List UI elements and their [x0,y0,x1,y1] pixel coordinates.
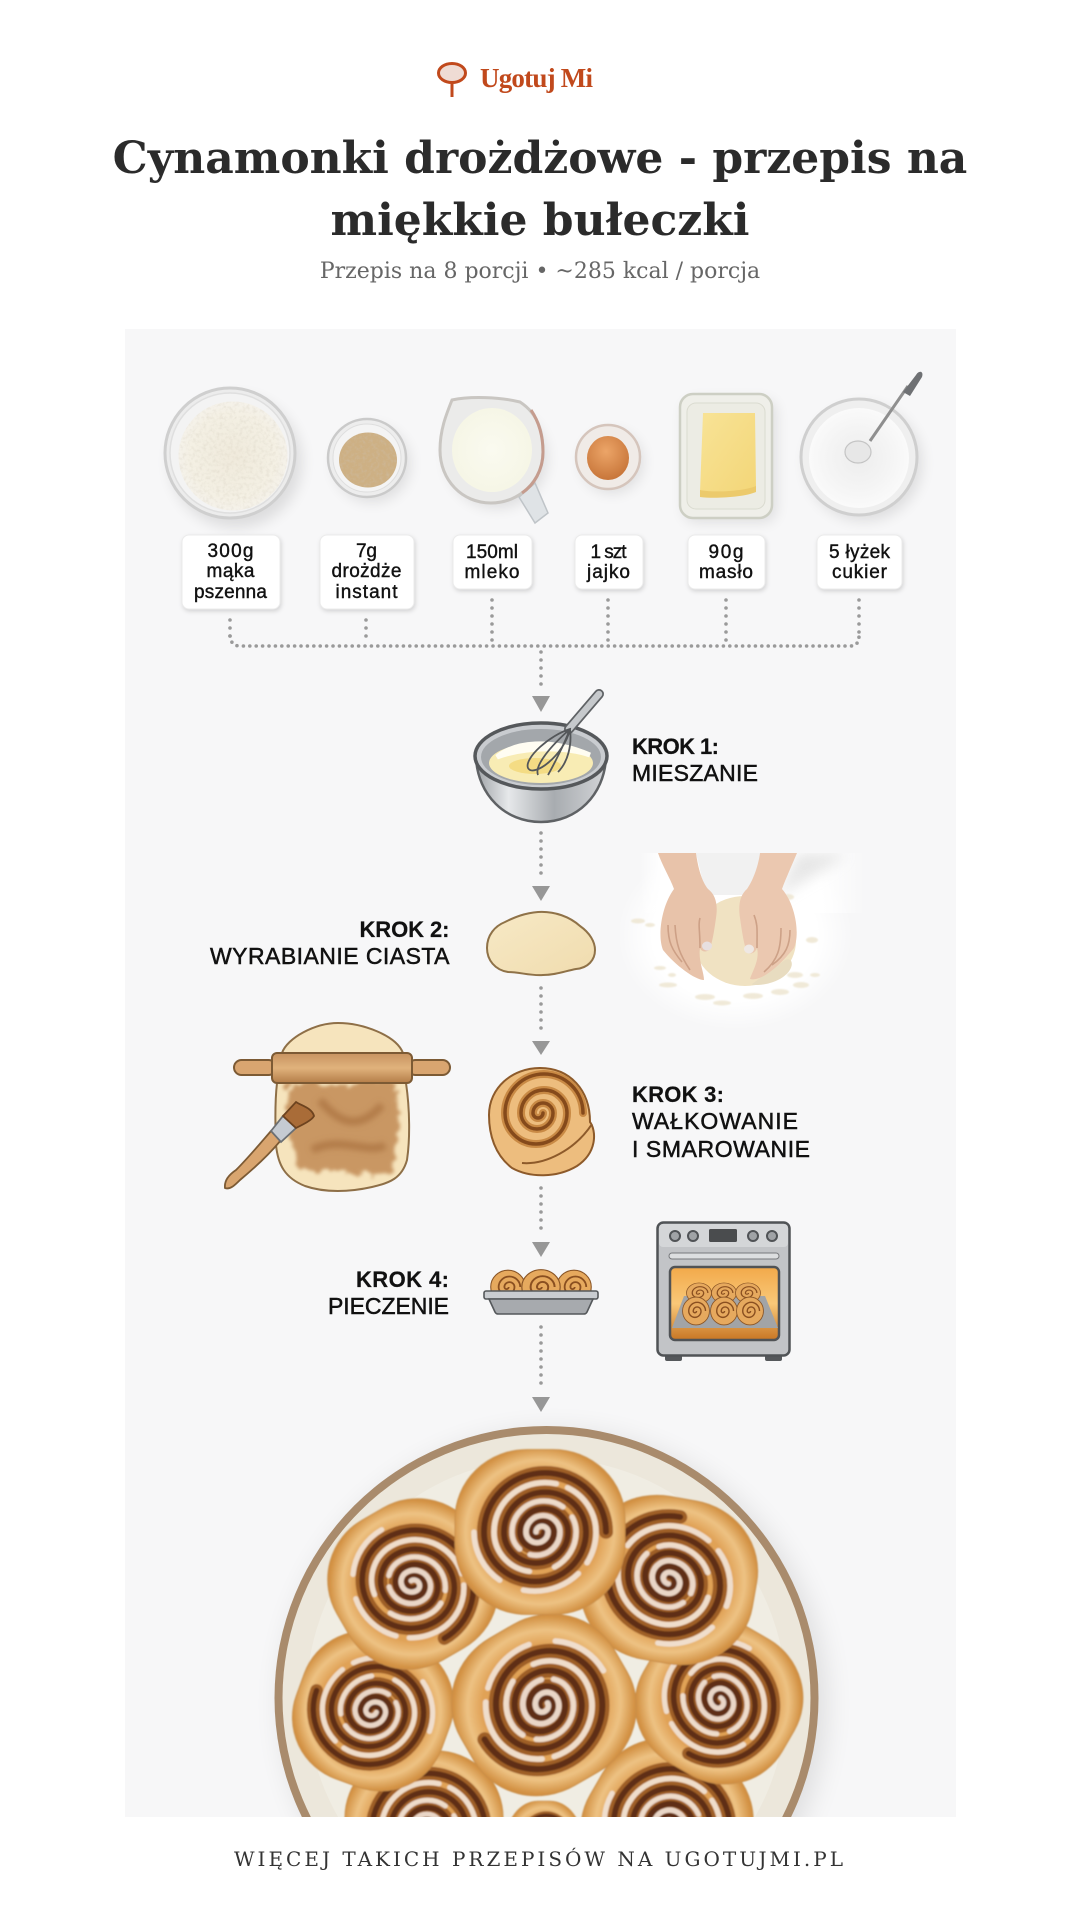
icon: mixing bowl with whisk [475,694,607,822]
step 4 label: KROK 4: [356,1267,449,1292]
step 2 label: KROK 2: [360,917,450,942]
label: 90g masło [688,535,765,589]
image: hands kneading dough [631,853,831,1006]
step 1 label: MIESZANIE [632,760,758,786]
label: 1 szt jajko [575,535,643,589]
label: 300g mąka pszenna [182,535,280,609]
label: 300g mąka pszenna: pszenna [194,582,267,603]
label: 90g masło: masło [699,562,753,583]
step 3 label: WAŁKOWANIE [632,1108,798,1134]
connector: ingredients merge [230,600,859,646]
step 4 label [328,1267,449,1319]
label: 300g mąka pszenna: 300g [208,541,254,562]
icon: egg in dish [576,425,643,493]
label: 150ml mleko: 150ml [466,542,518,563]
label: 5 łyżek cukier: 5 łyżek [829,542,890,563]
label: 150ml mleko [453,535,532,589]
panel: ingredients row [165,372,922,609]
icon: dough ball [487,912,595,975]
icon: milk measuring cup [440,398,548,523]
label: 5 łyżek cukier [817,535,902,589]
logo [438,63,593,97]
icon: butter dish [680,394,776,522]
label: 7g drożdże instant [320,535,414,609]
icon: yeast dish [328,419,410,502]
step 1 label [632,734,758,786]
subtitle: Przepis na 8 porcji • ~285 kcal / porcja [320,259,760,284]
cinnamon rolls [291,1448,804,1817]
arrow: to step 1 [532,652,550,712]
arrow: to step 3 [532,988,550,1055]
title: Cynamonki drożdżowe - przepis na [113,133,967,184]
icon: rolling pin, cinnamon dough and brush [225,1023,450,1191]
step 3 label: KROK 3: [632,1082,724,1107]
label: 7g drożdże instant: drożdże [332,561,402,582]
title: miękkie bułeczki [331,195,749,246]
step 2 label [210,917,450,969]
plate [274,1426,818,1817]
step 4 label: PIECZENIE [328,1293,449,1319]
icon: tray with rolls [484,1270,598,1314]
footer text: WIĘCEJ TAKICH PRZEPISÓW NA UGOTUJMI.PL [234,1846,846,1871]
label: 1 szt jajko: 1 szt [590,542,627,563]
icon: spoon logo [438,64,466,97]
icon: oven with rolls [658,1222,790,1361]
label: 90g masło: 90g [708,542,744,563]
image: plate of finished cinnamon rolls [274,1426,832,1817]
panel: recipe illustration [158,372,934,1817]
step 2 label: WYRABIANIE CIASTA [210,943,450,969]
label: 7g drożdże instant: 7g [356,541,377,562]
logo wordmark: Ugotuj Mi [480,63,593,93]
label: 300g mąka pszenna: mąka [206,561,255,582]
step 3 label [632,1082,810,1162]
icon: sugar bowl with spoon [801,372,922,521]
label: 5 łyżek cukier: cukier [832,562,888,583]
step 1 label: KROK 1: [632,734,719,759]
step 3 label: I SMAROWANIE [632,1136,810,1162]
label: 150ml mleko: mleko [464,562,520,583]
arrow: to step 2 [532,833,550,901]
arrow: to step 4 [532,1188,550,1257]
icon: flour bowl [165,388,302,528]
label: 1 szt jajko: jajko [586,562,630,583]
arrow: to finished rolls [532,1327,550,1412]
icon: cinnamon roll spiral [489,1068,594,1175]
label: 7g drożdże instant: instant [336,582,398,603]
